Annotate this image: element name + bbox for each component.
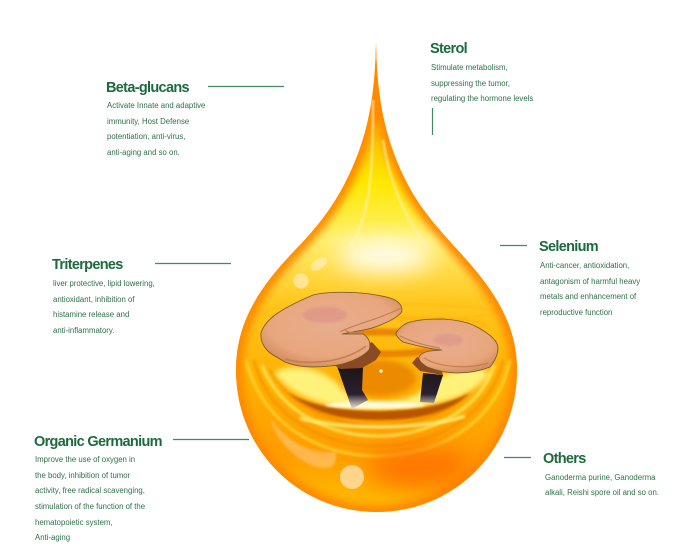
callout: Others: Others [543, 451, 586, 467]
callout: Organic Germanium [34, 434, 249, 542]
callout: Beta-glucans [106, 80, 284, 157]
callout: Organic Germanium: Anti-aging [35, 533, 70, 542]
callout: Organic Germanium: the body, inhibition of tumor [35, 471, 131, 480]
mushroom: right [396, 319, 498, 403]
bright ripple crescent [274, 367, 490, 410]
callout: Triterpenes [52, 257, 231, 335]
callout: Triterpenes: anti-inflammatory. [53, 326, 114, 335]
callout: Selenium: metals and enhancement of [540, 292, 637, 301]
callout: Beta-glucans: potentiation, anti-virus, [107, 132, 185, 141]
callout: Sterol: Stimulate metabolism, [431, 63, 508, 72]
callout: Triterpenes: histamine release and [53, 310, 129, 319]
mushroom: left [261, 292, 402, 409]
dark ripple band [288, 393, 470, 420]
callout: Beta-glucans: anti-aging and so on. [107, 148, 180, 157]
callout: Triterpenes: Triterpenes [52, 257, 123, 273]
callout: Selenium: Selenium [539, 239, 598, 255]
callout: Beta-glucans: Activate Innate and adaptive [107, 101, 205, 110]
callout: Organic Germanium: Improve the use of oxygen in [35, 455, 135, 464]
callout: Organic Germanium: hematopoietic system, [35, 518, 113, 527]
oil drop [230, 40, 525, 515]
callout: Sterol: regulating the hormone levels [431, 94, 533, 103]
neck highlights [350, 100, 428, 248]
callout: Organic Germanium: activity, free radical scavenging, [35, 486, 145, 495]
callout: Beta-glucans: immunity, Host Defense [107, 117, 189, 126]
callout: Organic Germanium: stimulation of the function of the [35, 502, 145, 511]
callout: Sterol [430, 41, 533, 135]
callout: Others: alkali, Reishi spore oil and so on. [545, 488, 659, 497]
bubbles [340, 465, 364, 489]
callout: Triterpenes: liver protective, lipid lowering, [53, 279, 155, 288]
callout: Others [504, 451, 659, 497]
lower orange hotspot [368, 448, 472, 488]
callout: Selenium: reproductive function [540, 308, 612, 317]
callout: Beta-glucans: Beta-glucans [106, 80, 190, 96]
callout: Triterpenes: antioxidant, inhibition of [53, 295, 135, 304]
callout: Selenium: antagonism of harmful heavy [540, 277, 640, 286]
callout: Selenium: Anti-cancer, antioxidation, [540, 261, 629, 270]
callout: Organic Germanium: Organic Germanium [34, 434, 162, 450]
callout: Sterol: Sterol [430, 41, 467, 57]
top glow [337, 240, 433, 272]
callout: Sterol: suppressing the tumor, [431, 79, 510, 88]
ripples [246, 304, 510, 456]
callout: Others: Ganoderma purine, Ganoderma [545, 473, 656, 482]
callout: Selenium [500, 239, 640, 317]
lower-left reflection [270, 418, 336, 468]
